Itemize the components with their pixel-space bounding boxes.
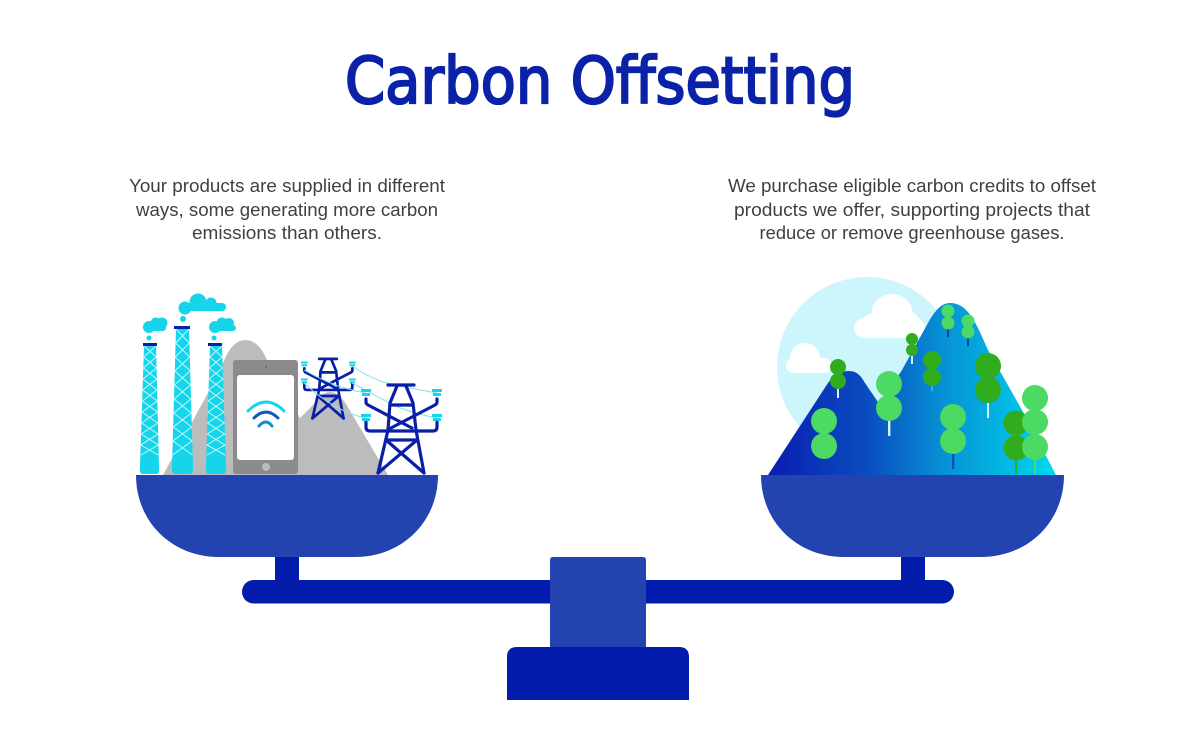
title: Carbon Offsetting bbox=[345, 45, 855, 119]
text block: left description: ways, some generating more carbon bbox=[135, 200, 438, 220]
text block: right description: products we offer, supporting projects that bbox=[734, 200, 1090, 220]
chimney 2 bbox=[172, 316, 193, 474]
text block: right description: We purchase eligible carbon credits to offset bbox=[728, 176, 1096, 196]
tree bbox=[876, 371, 902, 436]
text block: left description bbox=[129, 176, 445, 243]
smoke clouds bbox=[143, 294, 236, 333]
scale fulcrum bbox=[550, 557, 646, 648]
tree bbox=[942, 304, 954, 337]
small cloud bbox=[786, 343, 832, 373]
tree bbox=[1004, 410, 1028, 474]
tree bbox=[830, 359, 846, 398]
text block: right description: reduce or remove greenhouse gases. bbox=[760, 223, 1064, 243]
chimney 1 bbox=[140, 336, 159, 474]
left scale pan bbox=[136, 475, 438, 557]
scale beam bbox=[242, 580, 954, 604]
tree bbox=[975, 353, 1001, 418]
large cloud bbox=[854, 294, 925, 338]
left pan stem bbox=[275, 550, 299, 582]
icon: smartphone with wifi bbox=[233, 360, 298, 474]
illustration: grey mountains bbox=[163, 340, 388, 475]
tree bbox=[940, 404, 966, 469]
scale base bbox=[507, 647, 689, 700]
illustration: pale sun bbox=[777, 277, 957, 457]
icon: white clouds bbox=[786, 294, 925, 373]
icon: small pylon bbox=[301, 359, 356, 418]
text block: left description: Your products are supplied in different bbox=[129, 176, 445, 196]
tree bbox=[1022, 385, 1048, 474]
chimney 3 bbox=[206, 336, 226, 474]
tree bbox=[962, 314, 974, 346]
icon: factory chimneys bbox=[140, 294, 236, 474]
power lines bbox=[304, 366, 437, 418]
icon: large pylon bbox=[361, 385, 442, 473]
text block: right description bbox=[728, 176, 1096, 243]
illustration: trees bbox=[811, 304, 1048, 474]
illustration: blue mountains bbox=[768, 303, 1056, 475]
right pan stem bbox=[901, 550, 925, 582]
tree bbox=[811, 408, 837, 473]
tree bbox=[923, 351, 941, 391]
right scale pan bbox=[761, 475, 1064, 557]
text block: left description: emissions than others. bbox=[192, 223, 382, 243]
tree bbox=[906, 333, 918, 364]
